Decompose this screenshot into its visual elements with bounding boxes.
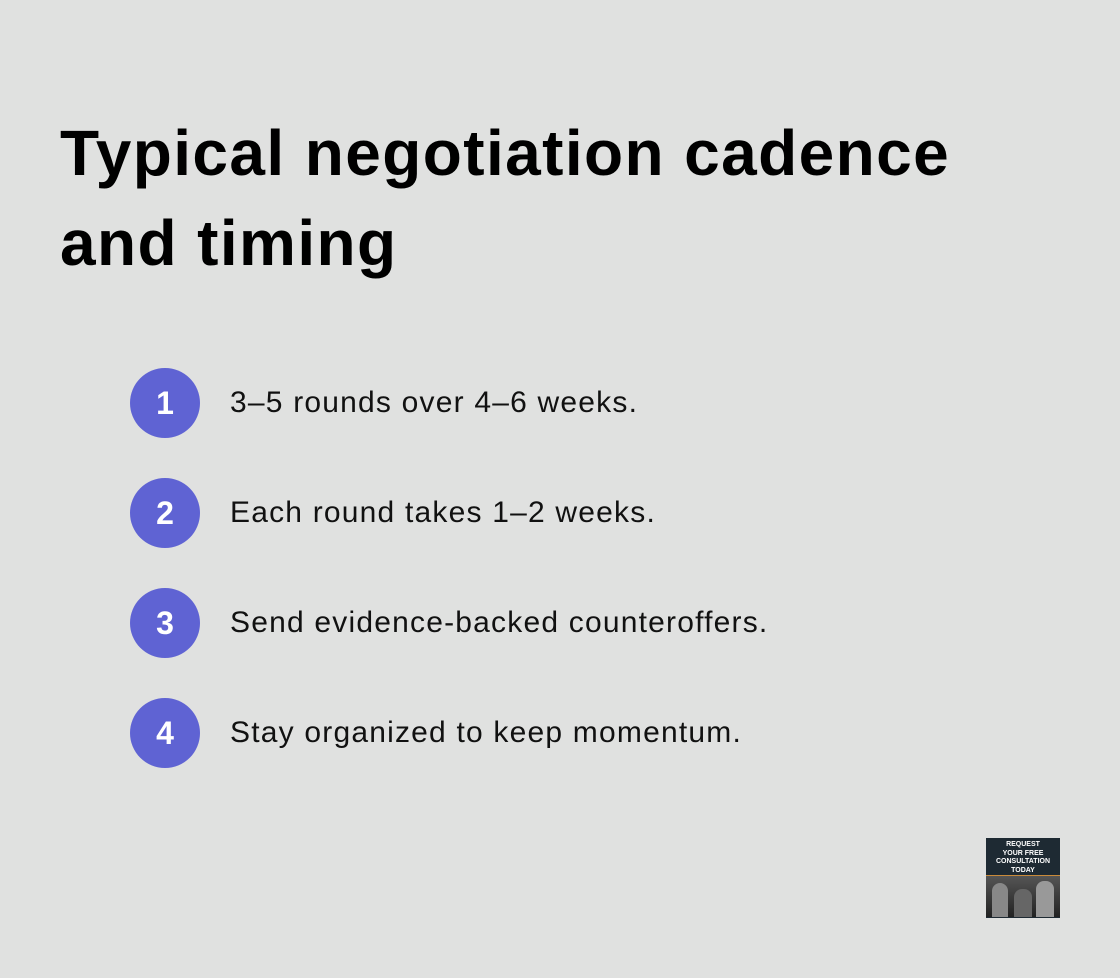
item 1 (130, 368, 638, 438)
logo: consultation badge: REQUEST (1006, 841, 1040, 848)
item 1: 1 (156, 385, 174, 421)
item 3: 3 (156, 605, 174, 641)
item 2: 2 (156, 495, 174, 531)
title: Typical negotiation cadence (60, 117, 950, 189)
title: and timing (60, 207, 398, 279)
item 2: Each round takes 1–2 weeks. (230, 496, 656, 529)
item 3: Send evidence-backed counteroffers. (230, 606, 768, 639)
logo: consultation badge (986, 838, 1060, 918)
title (60, 117, 950, 279)
logo: consultation badge: YOUR FREE (1003, 850, 1043, 856)
item 4 (130, 698, 742, 768)
item 4: Stay organized to keep momentum. (230, 716, 742, 749)
logo: consultation badge: TODAY (1011, 866, 1035, 874)
item 2 (130, 478, 656, 548)
item 4: 4 (156, 715, 174, 751)
item 1: 3–5 rounds over 4–6 weeks. (230, 386, 638, 419)
logo: consultation badge: CONSULTATION (996, 858, 1050, 865)
item 3 (130, 588, 768, 658)
